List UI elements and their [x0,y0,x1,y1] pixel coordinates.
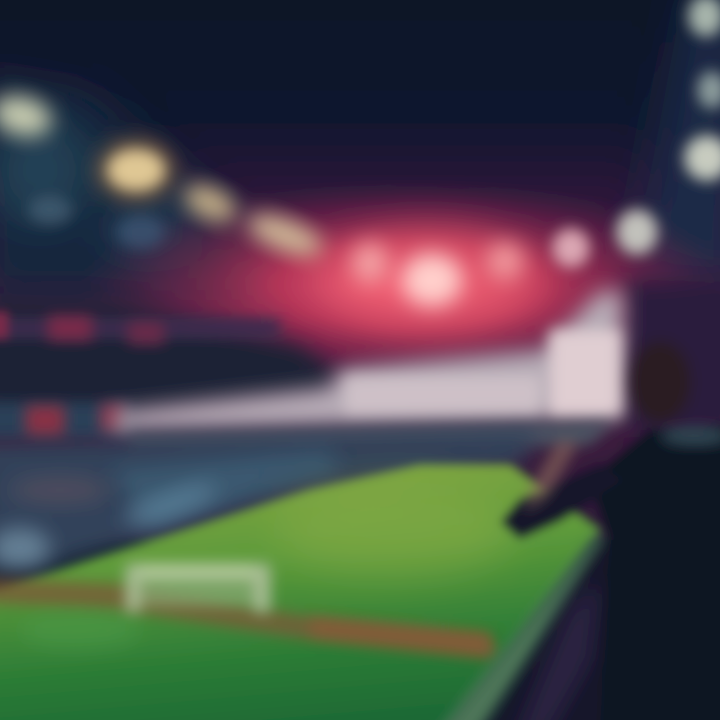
red glow on the horizon [80,180,720,390]
football pitch [0,465,600,720]
crowd in lower stand [0,430,540,575]
spectator silhouette [502,342,720,720]
spectator shoulder highlight [660,426,720,446]
touchline [432,532,606,720]
spectator arm [502,465,625,538]
foreground railing [485,500,720,720]
right side dark stand [625,280,720,430]
spectator head [630,342,690,422]
left upper stand [0,70,280,300]
white lower stand rising to the right [115,290,622,450]
goal [126,564,270,612]
night sky [0,0,720,540]
dark stand tier with red banners [0,300,340,438]
right upper stand [620,0,720,300]
spectator body [590,425,720,720]
floodlights [0,0,720,306]
spectator forearm light [525,442,578,512]
